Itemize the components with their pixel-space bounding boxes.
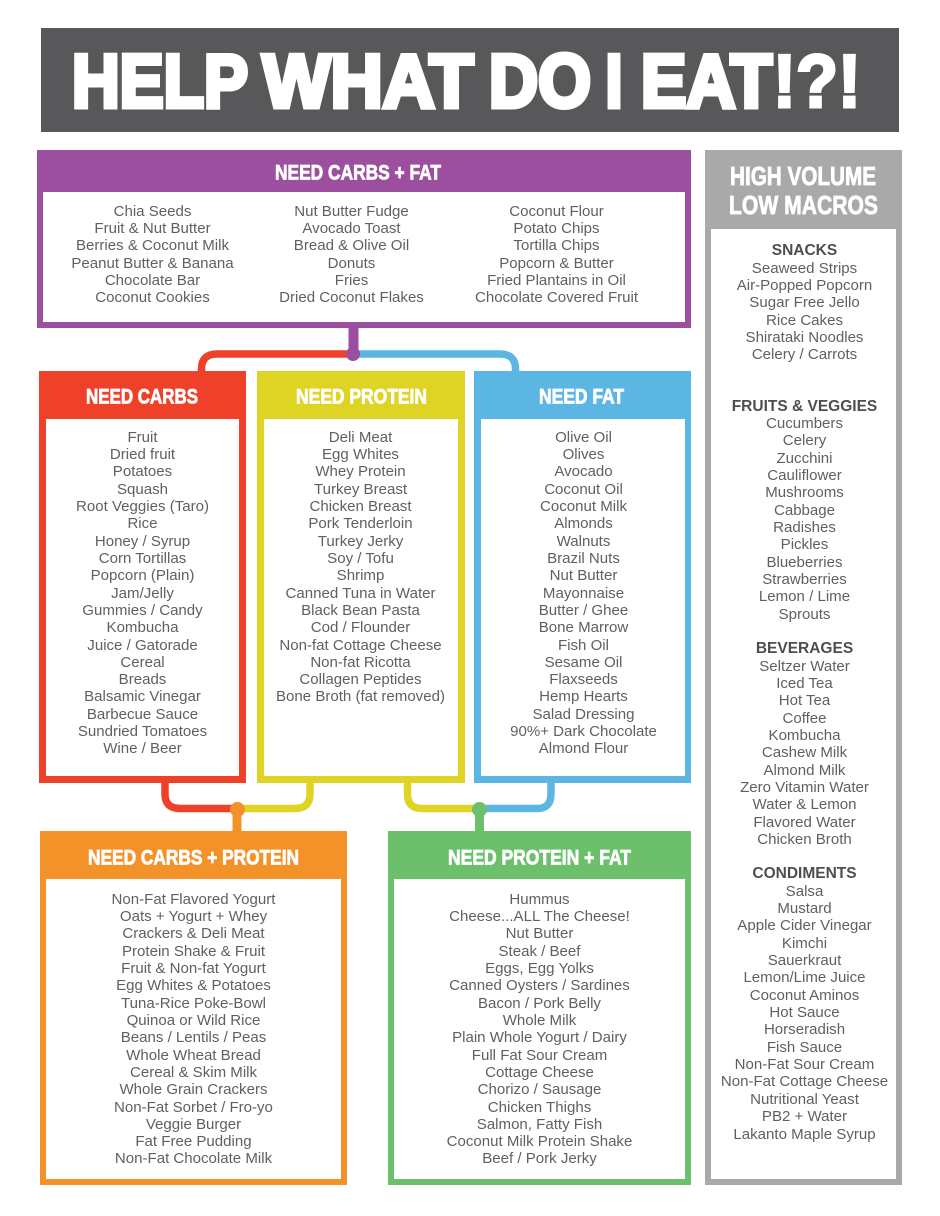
list: condiments: Non-Fat Cottage Cheese: [721, 1073, 888, 1090]
list: carbs + fat column 2: [279, 203, 424, 306]
list: condiments: Apple Cider Vinegar: [737, 917, 872, 934]
title banner: [41, 28, 899, 132]
list: carbs + fat column 1: Chocolate Bar: [105, 272, 200, 289]
heading: need carbs + protein: NEED CARBS + PROTEIN: [88, 846, 299, 870]
list: carbs + protein foods: Whole Grain Crackers: [119, 1081, 268, 1098]
list: protein foods: Chicken Breast: [309, 498, 412, 515]
list: fruits and veggies: Zucchini: [776, 450, 833, 467]
list: beverages: Coffee: [782, 710, 827, 727]
list: carbs + fat column 2: Fries: [335, 272, 368, 289]
list: carbs + protein foods: Non-Fat Flavored Yogurt: [112, 891, 276, 908]
list: condiments: Lemon/Lime Juice: [743, 969, 866, 986]
list: carbs foods: Gummies / Candy: [82, 602, 203, 619]
list: protein foods: Canned Tuna in Water: [286, 585, 436, 602]
panel: high volume low macros: [705, 150, 902, 1185]
list: fruits and veggies: Sprouts: [779, 606, 830, 623]
list: carbs foods: Cereal: [120, 654, 165, 671]
list: fat foods: Avocado: [554, 463, 613, 480]
list: carbs + protein foods: Crackers & Deli Meat: [122, 925, 265, 942]
list: condiments: Horseradish: [764, 1021, 845, 1038]
title banner: I: [606, 39, 622, 123]
list: carbs + protein foods: Tuna-Rice Poke-Bowl: [121, 995, 266, 1012]
list: fruits and veggies: Cabbage: [774, 502, 835, 519]
list: beverages: Kombucha: [769, 727, 841, 744]
list: carbs + fat column 3: Popcorn & Butter: [499, 255, 614, 272]
list: condiments: Salsa: [786, 883, 824, 900]
list: condiments: Sauerkraut: [768, 952, 842, 969]
list: protein foods: Non-fat Ricotta: [310, 654, 411, 671]
list: beverages: BEVERAGES: [756, 640, 853, 657]
heading: high volume low macros: [729, 161, 878, 220]
title banner: EAT: [641, 39, 772, 123]
list: fruits and veggies: Blueberries: [766, 554, 843, 571]
list: carbs + fat column 1: Fruit & Nut Butter: [94, 220, 211, 237]
list: condiments: Lakanto Maple Syrup: [733, 1126, 876, 1143]
list: fat foods: Fish Oil: [558, 637, 609, 654]
list: carbs foods: Jam/Jelly: [111, 585, 174, 602]
list: protein foods: Pork Tenderloin: [308, 515, 413, 532]
list: fat foods: Bone Marrow: [539, 619, 628, 636]
list: protein + fat foods: Full Fat Sour Cream: [472, 1047, 607, 1064]
list: protein foods: Deli Meat: [329, 429, 393, 446]
list: carbs + fat column 2: Bread & Olive Oil: [294, 237, 409, 254]
title banner: !?!: [773, 39, 861, 123]
panel: need fat: [474, 371, 691, 783]
heading: high volume low macros: LOW MACROS: [729, 190, 878, 220]
list: condiments: Coconut Aminos: [750, 987, 859, 1004]
list: beverages: Iced Tea: [776, 675, 833, 692]
list: carbs foods: Juice / Gatorade: [87, 637, 198, 654]
list: protein + fat foods: Plain Whole Yogurt / Dairy: [452, 1029, 627, 1046]
list: condiments: Kimchi: [782, 935, 827, 952]
list: carbs foods: Kombucha: [107, 619, 179, 636]
list: carbs foods: Breads: [119, 671, 166, 688]
list: carbs + protein foods: Fruit & Non-fat Yogurt: [121, 960, 267, 977]
list: carbs + fat column 1: Coconut Cookies: [95, 289, 210, 306]
list: protein foods: Non-fat Cottage Cheese: [279, 637, 442, 654]
list: beverages: Chicken Broth: [757, 831, 852, 848]
list: carbs + protein foods: Non-Fat Chocolate Milk: [115, 1150, 273, 1167]
list: carbs + protein foods: Egg Whites & Potatoes: [116, 977, 271, 994]
list: carbs foods: Potatoes: [113, 463, 172, 480]
list: protein + fat foods: Cottage Cheese: [485, 1064, 594, 1081]
list: protein foods: Turkey Jerky: [318, 533, 404, 550]
list: fat foods: Walnuts: [557, 533, 610, 550]
panel: need carbs + fat: [37, 150, 691, 328]
list: snacks: [737, 242, 872, 363]
heading: need carbs + fat: NEED CARBS + FAT: [275, 162, 441, 184]
list: carbs + fat column 3: Fried Plantains in Oil: [487, 272, 626, 289]
title banner: DO: [489, 39, 591, 123]
list: carbs + fat column 2: Dried Coconut Flakes: [279, 289, 424, 306]
list: protein foods: Egg Whites: [322, 446, 399, 463]
list: fruits and veggies: [732, 398, 877, 623]
list: carbs + protein foods: Non-Fat Sorbet / Fro-yo: [114, 1099, 273, 1116]
title banner: HELP: [72, 39, 248, 123]
list: carbs foods: Root Veggies (Taro): [76, 498, 209, 515]
list: snacks: Sugar Free Jello: [749, 294, 860, 311]
list: carbs + protein foods: Quinoa or Wild Rice: [127, 1012, 260, 1029]
list: condiments: Fish Sauce: [767, 1039, 842, 1056]
list: fruits and veggies: Lemon / Lime: [759, 588, 850, 605]
list: fat foods: [510, 429, 657, 757]
list: fat foods: Coconut Oil: [544, 481, 623, 498]
title banner: WHAT: [262, 39, 474, 123]
list: protein foods: Collagen Peptides: [299, 671, 422, 688]
list: protein + fat foods: Bacon / Pork Belly: [478, 995, 601, 1012]
list: protein + fat foods: Beef / Pork Jerky: [482, 1150, 597, 1167]
heading: need protein + fat: NEED PROTEIN + FAT: [448, 846, 631, 870]
list: condiments: PB2 + Water: [762, 1108, 847, 1125]
list: fat foods: Sesame Oil: [545, 654, 622, 671]
list: carbs foods: [76, 429, 209, 757]
list: carbs + protein foods: Beans / Lentils / Peas: [121, 1029, 266, 1046]
list: condiments: Non-Fat Sour Cream: [735, 1056, 874, 1073]
list: snacks: Rice Cakes: [766, 312, 843, 329]
list: fat foods: Salad Dressing: [532, 706, 635, 723]
list: beverages: Water & Lemon: [753, 796, 856, 813]
list: protein + fat foods: Eggs, Egg Yolks: [485, 960, 594, 977]
list: carbs + protein foods: Oats + Yogurt + Whey: [120, 908, 268, 925]
list: fat foods: Almond Flour: [539, 740, 628, 757]
list: carbs foods: Corn Tortillas: [99, 550, 186, 567]
list: carbs + protein foods: [112, 891, 276, 1167]
list: carbs + protein foods: Fat Free Pudding: [135, 1133, 252, 1150]
list: protein foods: Shrimp: [337, 567, 384, 584]
connector: carbs + fat to carbs and fat: [202, 326, 516, 373]
list: protein + fat foods: Canned Oysters / Sardines: [449, 977, 630, 994]
list: protein + fat foods: Salmon, Fatty Fish: [477, 1116, 602, 1133]
list: carbs foods: Dried fruit: [110, 446, 176, 463]
list: fat foods: 90%+ Dark Chocolate: [510, 723, 657, 740]
list: fruits and veggies: Cucumbers: [766, 415, 843, 432]
list: beverages: Zero Vitamin Water: [740, 779, 869, 796]
list: carbs + fat column 3: Chocolate Covered Fruit: [475, 289, 639, 306]
heading: need fat: NEED FAT: [539, 386, 624, 408]
list: fat foods: Olives: [563, 446, 604, 463]
list: carbs foods: Rice: [127, 515, 158, 532]
list: carbs foods: Squash: [117, 481, 168, 498]
list: carbs + fat column 2: Nut Butter Fudge: [294, 203, 409, 220]
list: carbs + protein foods: Cereal & Skim Milk: [130, 1064, 258, 1081]
list: fruits and veggies: Pickles: [781, 536, 828, 553]
list: protein foods: Turkey Breast: [314, 481, 408, 498]
list: condiments: CONDIMENTS: [752, 865, 857, 882]
list: condiments: Hot Sauce: [769, 1004, 840, 1021]
list: snacks: Celery / Carrots: [752, 346, 857, 363]
list: protein + fat foods: Hummus: [509, 891, 570, 908]
list: fat foods: Hemp Hearts: [539, 688, 628, 705]
list: fruits and veggies: Radishes: [773, 519, 836, 536]
list: carbs foods: Popcorn (Plain): [91, 567, 194, 584]
list: fat foods: Flaxseeds: [549, 671, 618, 688]
list: carbs foods: Balsamic Vinegar: [84, 688, 201, 705]
list: protein + fat foods: Chorizo / Sausage: [478, 1081, 601, 1098]
list: fruits and veggies: Strawberries: [762, 571, 847, 588]
list: fat foods: Almonds: [554, 515, 613, 532]
list: carbs + fat column 2: Donuts: [328, 255, 375, 272]
list: protein foods: Cod / Flounder: [311, 619, 410, 636]
list: carbs + protein foods: Protein Shake & Fruit: [122, 943, 266, 960]
list: fruits and veggies: Celery: [783, 432, 827, 449]
heading: need protein: NEED PROTEIN: [296, 386, 427, 408]
list: protein + fat foods: Chicken Thighs: [488, 1099, 591, 1116]
list: protein foods: [276, 429, 445, 705]
list: protein + fat foods: Steak / Beef: [499, 943, 581, 960]
list: carbs + fat column 1: Berries & Coconut Milk: [76, 237, 229, 254]
list: protein + fat foods: Coconut Milk Protein Shake: [447, 1133, 632, 1150]
list: fat foods: Coconut Milk: [540, 498, 627, 515]
list: condiments: Mustard: [777, 900, 832, 917]
list: protein + fat foods: [447, 891, 632, 1167]
list: fruits and veggies: Mushrooms: [765, 484, 844, 501]
list: carbs foods: Barbecue Sauce: [87, 706, 198, 723]
list: fat foods: Brazil Nuts: [547, 550, 620, 567]
panel: need protein + fat: [388, 831, 691, 1185]
list: carbs foods: Wine / Beer: [103, 740, 182, 757]
list: snacks: Air-Popped Popcorn: [737, 277, 872, 294]
list: protein foods: Black Bean Pasta: [301, 602, 421, 619]
list: carbs foods: Sundried Tomatoes: [78, 723, 207, 740]
list: beverages: Hot Tea: [779, 692, 831, 709]
heading: high volume low macros: HIGH VOLUME: [730, 161, 876, 191]
list: protein + fat foods: Whole Milk: [503, 1012, 577, 1029]
list: protein + fat foods: Nut Butter: [506, 925, 573, 942]
list: carbs + fat column 3: Coconut Flour: [509, 203, 604, 220]
list: carbs + protein foods: Veggie Burger: [146, 1116, 241, 1133]
list: snacks: Seaweed Strips: [752, 260, 857, 277]
list: fat foods: Nut Butter: [550, 567, 617, 584]
list: fat foods: Olive Oil: [555, 429, 612, 446]
list: beverages: Flavored Water: [753, 814, 856, 831]
list: carbs + fat column 1: [71, 203, 234, 306]
list: fat foods: Mayonnaise: [543, 585, 624, 602]
list: carbs + fat column 3: Potato Chips: [513, 220, 600, 237]
list: condiments: [721, 865, 888, 1143]
list: beverages: Seltzer Water: [759, 658, 850, 675]
list: carbs + fat column 3: [475, 203, 639, 306]
list: beverages: Almond Milk: [764, 762, 846, 779]
list: carbs foods: Fruit: [127, 429, 158, 446]
panel: need carbs + protein: [40, 831, 347, 1185]
list: carbs foods: Honey / Syrup: [95, 533, 190, 550]
list: protein + fat foods: Cheese...ALL The Cheese!: [449, 908, 630, 925]
heading: need carbs: NEED CARBS: [86, 386, 198, 408]
list: beverages: [740, 640, 869, 848]
list: fat foods: Butter / Ghee: [539, 602, 628, 619]
list: carbs + fat column 1: Peanut Butter & Banana: [71, 255, 234, 272]
list: carbs + fat column 2: Avocado Toast: [302, 220, 401, 237]
list: carbs + fat column 1: Chia Seeds: [114, 203, 191, 220]
list: condiments: Nutritional Yeast: [750, 1091, 860, 1108]
connector: protein and fat to protein + fat: [408, 781, 551, 833]
list: protein foods: Bone Broth (fat removed): [276, 688, 445, 705]
list: protein foods: Whey Protein: [315, 463, 406, 480]
list: fruits and veggies: Cauliflower: [767, 467, 842, 484]
panel: need carbs: [39, 371, 246, 783]
list: beverages: Cashew Milk: [762, 744, 848, 761]
panel: need protein: [257, 371, 465, 783]
list: carbs + protein foods: Whole Wheat Bread: [126, 1047, 261, 1064]
list: snacks: SNACKS: [772, 242, 837, 259]
connector: carbs and protein to carbs + protein: [165, 781, 310, 833]
list: carbs + fat column 3: Tortilla Chips: [513, 237, 600, 254]
list: fruits and veggies: FRUITS & VEGGIES: [732, 398, 877, 415]
list: snacks: Shirataki Noodles: [746, 329, 863, 346]
list: protein foods: Soy / Tofu: [327, 550, 394, 567]
